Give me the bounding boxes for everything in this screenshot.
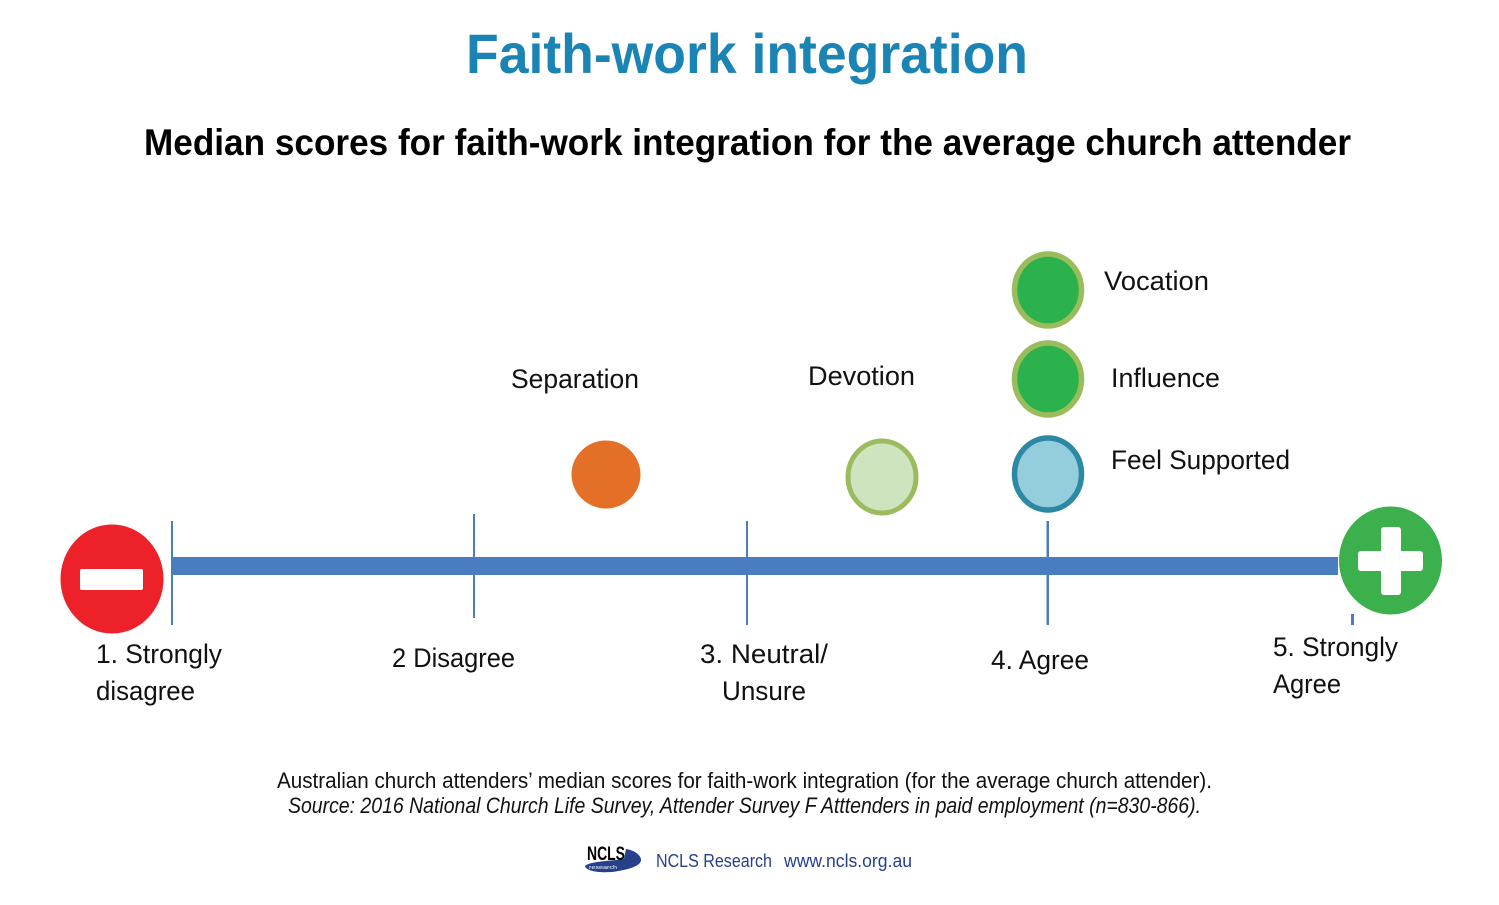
title: Faith-work integration [466,22,1028,85]
label: 3. Neutral/Unsure: 3. Neutral/ [700,639,829,669]
data point: Separation: Separation [511,364,639,394]
label: 1. Strongly disagree: disagree [96,676,195,706]
data point: Influence: Influence [1111,363,1220,393]
label: 2 Disagree: 2 Disagree [392,643,515,673]
icon: plus sign [1339,506,1442,614]
source note: Source: 2016 National Church Life Survey, Attender Survey F Atttenders in paid employment (n=830-866). [288,793,1201,818]
logo: NCLS: NCLS [587,844,625,865]
label: 4. Agree: 4. Agree [991,645,1089,675]
footer text [656,851,912,871]
label: 3. Neutral/Unsure [700,639,829,706]
icon: minus sign [60,524,164,634]
data point: Devotion: Devotion [808,361,915,391]
data point: Separation [511,364,640,508]
caption: Australian church attenders’ median scores for faith-work integration (for the average church attender). [277,768,1212,793]
label: 1. Strongly disagree [96,639,222,706]
subtitle: Median scores for faith-work integration for the average church attender [144,122,1351,163]
label: 5. Strongly Agree: Agree [1273,669,1341,699]
data point: Devotion [808,361,916,513]
data point: Vocation [1014,254,1209,326]
data point: Influence [1014,343,1220,415]
footer text: www.ncls.org.au [783,851,912,871]
scale axis [171,514,1354,625]
logo: NCLS: research [589,865,617,871]
label: 5. Strongly Agree: 5. Strongly [1273,632,1398,662]
footer text: NCLS Research [656,851,772,871]
label: 3. Neutral/Unsure: Unsure [722,676,806,706]
label: 1. Strongly disagree: 1. Strongly [96,639,222,669]
data point: Feel Supported [1014,438,1290,510]
data point: Feel Supported: Feel Supported [1111,445,1290,475]
label: 5. Strongly Agree [1273,632,1398,699]
data point: Vocation: Vocation [1104,266,1209,296]
logo: NCLS [585,844,641,872]
